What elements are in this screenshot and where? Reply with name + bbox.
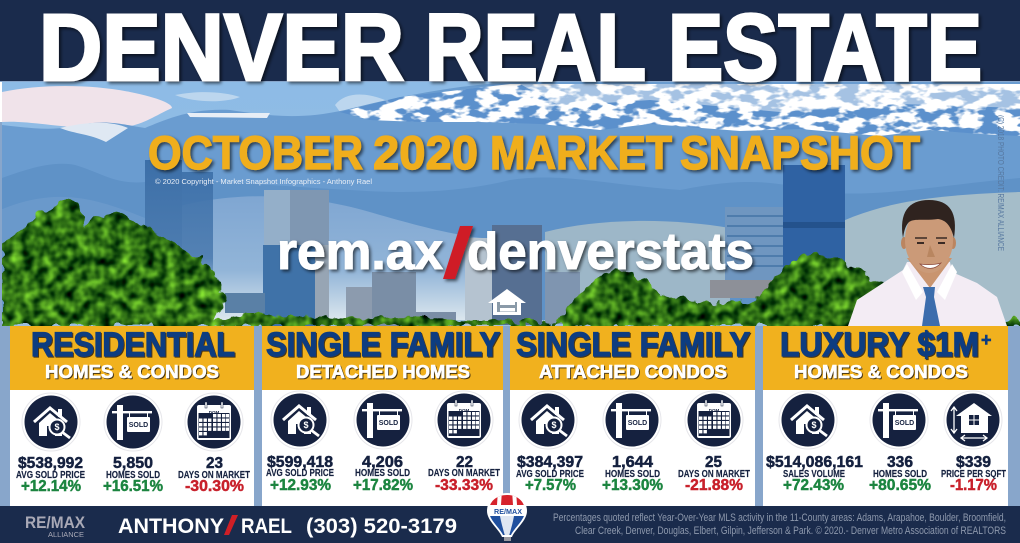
- stat: price per sqft: $339: [956, 454, 991, 471]
- photo: Denver skyline and mountains: [0, 82, 1020, 326]
- stat: avg sold price: $: [54, 422, 60, 432]
- stat: avg sold price: [16, 393, 85, 495]
- stat: homes sold: +80.65%: [869, 477, 931, 494]
- website address: [277, 223, 754, 281]
- stat: homes sold: SOLD: [628, 420, 647, 427]
- website address: denverstats: [467, 223, 754, 281]
- panel: residential: RESIDENTIAL: [31, 326, 235, 364]
- stat: avg sold price: AVG SOLD PRICE: [16, 469, 85, 481]
- panel: residential: HOMES & CONDOS: [45, 362, 219, 382]
- copyright line: © 2020 Copyright - Market Snapshot Infographics - Anthony Rael: [155, 177, 372, 186]
- RE/MAX balloon logo: RE/MAX: [494, 507, 522, 516]
- panel: single family detached: SINGLE FAMILY: [266, 326, 500, 364]
- RE/MAX Alliance logo: [25, 513, 86, 539]
- stat: homes sold: 336: [887, 454, 913, 471]
- agent portrait: [848, 200, 1007, 326]
- stat: homes sold: +13.30%: [602, 477, 663, 494]
- panel: luxury: HOMES & CONDOS: [794, 362, 968, 382]
- title text: [39, 0, 982, 101]
- panel: residential: [10, 326, 254, 506]
- stat: avg sold price: [266, 391, 334, 494]
- panel: single family detached: [262, 326, 503, 506]
- panel: luxury: [763, 326, 1008, 506]
- stat: avg sold price: +7.57%: [525, 477, 576, 494]
- agent name and phone: ANTHONY: [118, 515, 224, 538]
- stat: homes sold: [353, 391, 413, 494]
- stat: days on market: [178, 393, 250, 495]
- subtitle: October 2020 Market Snapshot: SNAPSHOT: [680, 126, 920, 179]
- stat: days on market: 22: [456, 454, 473, 471]
- panel: single family attached: [510, 326, 755, 506]
- panel: single family attached: SINGLE FAMILY: [516, 326, 750, 364]
- RE/MAX Alliance logo: RE/MAX: [25, 513, 86, 532]
- stat: homes sold: [103, 393, 163, 495]
- stat: homes sold: SOLD: [379, 420, 398, 427]
- stat: avg sold price: +12.14%: [21, 478, 81, 495]
- stat: avg sold price: +12.93%: [270, 477, 331, 494]
- skyline buildings: [145, 160, 182, 248]
- trees: [2, 199, 1020, 326]
- stat: days on market: -33.33%: [435, 477, 493, 494]
- stat: days on market: DOM: [459, 408, 470, 413]
- agent name and phone: (303) 520-3179: [306, 515, 457, 538]
- stat: sales volume: [766, 391, 863, 494]
- stat: days on market: [678, 391, 750, 494]
- stat: days on market: DOM: [209, 410, 220, 415]
- stat: avg sold price: AVG SOLD PRICE: [266, 467, 334, 479]
- panel: luxury: +: [981, 330, 992, 350]
- footer band: [0, 506, 1020, 543]
- RE/MAX balloon logo: [487, 493, 527, 541]
- stat: sales volume: +72.43%: [783, 477, 844, 494]
- stat: homes sold: HOMES SOLD: [106, 469, 160, 481]
- stat: avg sold price: $: [551, 420, 557, 430]
- subtitle: October 2020 Market Snapshot: OCTOBER: [148, 126, 363, 179]
- stat: homes sold: [602, 391, 663, 494]
- stat: sales volume: SALES VOLUME: [783, 468, 845, 480]
- stat: price per sqft: [941, 391, 1006, 494]
- stat: avg sold price: $538,992: [18, 455, 83, 472]
- stat: homes sold: 5,850: [113, 455, 153, 472]
- agent name and phone: [118, 515, 457, 538]
- panel: luxury: LUXURY $1M: [780, 326, 979, 364]
- website address: rem.ax: [277, 223, 443, 281]
- stat: days on market: DAYS ON MARKET: [678, 468, 750, 480]
- stat: avg sold price: $384,397: [517, 454, 583, 471]
- stat: price per sqft: -1.17%: [950, 477, 997, 494]
- stat: days on market: DOM: [709, 408, 720, 413]
- stat: sales volume: $: [811, 420, 817, 430]
- photo credit: (C) 2018 PHOTO CREDIT: RE/MAX ALLIANCE: [996, 115, 1005, 251]
- subtitle: October 2020 Market Snapshot: MARKET: [490, 126, 672, 179]
- footnote: [553, 512, 1006, 537]
- left white edge: [0, 82, 2, 122]
- stat: homes sold: HOMES SOLD: [605, 468, 660, 480]
- stat: homes sold: 4,206: [362, 454, 403, 471]
- stat: days on market: DAYS ON MARKET: [178, 469, 250, 481]
- stat: avg sold price: [516, 391, 584, 494]
- subtitle: October 2020 Market Snapshot: [148, 126, 920, 179]
- RE/MAX Alliance logo: ALLIANCE: [48, 530, 84, 539]
- stat: days on market: 25: [705, 454, 722, 471]
- stat: avg sold price: AVG SOLD PRICE: [516, 468, 584, 480]
- stat: days on market: DAYS ON MARKET: [428, 467, 500, 479]
- panel: single family detached: DETACHED HOMES: [296, 362, 470, 382]
- stat: homes sold: +17.82%: [353, 477, 413, 494]
- subtitle: October 2020 Market Snapshot: 2020: [373, 126, 478, 179]
- icon: equal housing: [488, 289, 526, 315]
- stat: avg sold price: $599,418: [267, 454, 333, 471]
- stat: days on market: -21.88%: [685, 477, 743, 494]
- stat: days on market: -30.30%: [185, 478, 244, 495]
- agent name and phone: RAEL: [241, 515, 292, 538]
- stat: homes sold: 1,644: [612, 454, 653, 471]
- panel: single family attached: ATTACHED CONDOS: [539, 362, 727, 382]
- stat: avg sold price: $: [303, 420, 309, 430]
- stat: homes sold: SOLD: [895, 420, 914, 427]
- title band: [0, 0, 1020, 81]
- stat: days on market: [428, 391, 500, 494]
- stat: homes sold: +16.51%: [103, 478, 163, 495]
- stat: homes sold: HOMES SOLD: [873, 468, 927, 480]
- stat: homes sold: HOMES SOLD: [355, 467, 410, 479]
- stat: days on market: 23: [206, 455, 223, 472]
- stat: homes sold: [869, 391, 931, 494]
- stat: sales volume: $514,086,161: [766, 454, 863, 471]
- stat: homes sold: SOLD: [129, 422, 148, 429]
